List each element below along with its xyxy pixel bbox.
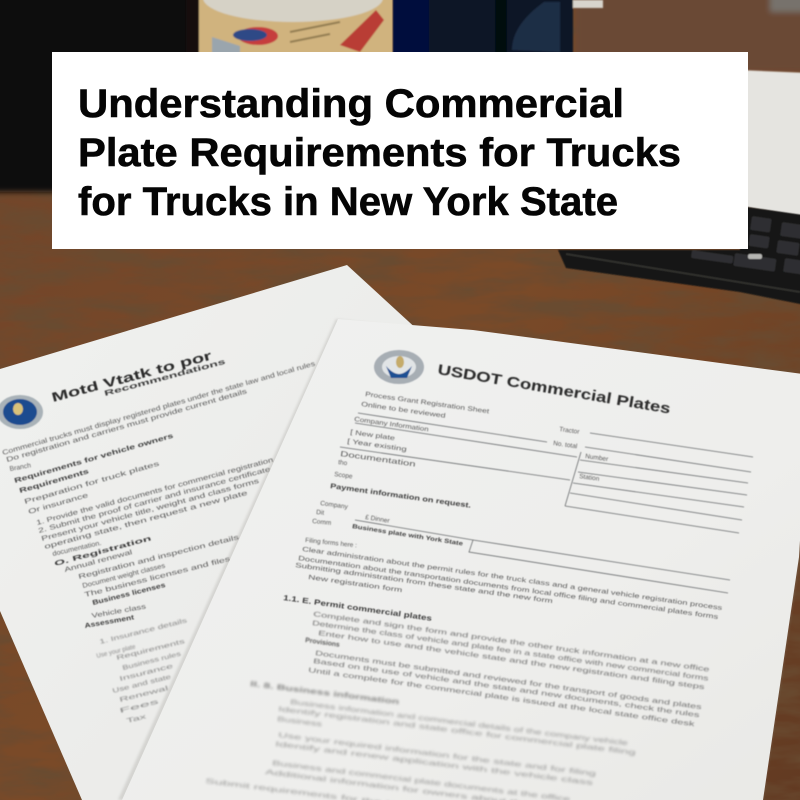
back paper body text: Annual renewal [64,549,134,574]
back paper body text: Preparation for truck plates [24,460,161,506]
back paper faded text: Use and state [112,673,172,695]
keyboard [558,206,800,306]
back paper body text: Vehicle class [91,603,147,620]
back paper seal [0,395,43,429]
dark background object [0,0,800,192]
front paper body text: New registration form [308,574,403,594]
back paper heading: Motd Vtatk to por [50,348,213,405]
front paper faded section: Business and commercial plate documents at the office [272,760,571,800]
back paper body text: Commercial trucks must display registered plates under the state law and local rules [2,360,317,457]
back paper body text: 1. Provide the valid documents for commercial registration [36,457,274,527]
form field text: Tractor [559,426,581,436]
back paper body text: Requirements for vehicle owners [14,433,174,485]
dark blue bottle [393,0,603,65]
back paper body text: Branch [9,462,32,473]
form field text: Payment information on request. [330,483,471,510]
front paper section text: Documents must be submitted and reviewed for the transport of goods and plates [315,650,703,711]
front paper faded section: Identify and renew application with the vehicle class [275,741,594,787]
front paper section text: Provisions [305,637,340,649]
front paper body text: Clear administration about the permit rules for the truck class and a general vehicle registration process [302,546,724,612]
title text: Understanding Commercial [78,82,624,126]
front paper faded section: Identify registration and state office for commercial plate filing [278,706,636,757]
back paper body text: Document weight classes [82,562,167,590]
back paper: requirements sheet [0,265,420,800]
front paper heading: USDOT Commercial Plates [436,361,672,418]
front paper faded section: Submit requirements for the trucks [205,778,425,800]
back paper body text: Do registration and carriers must provide current details [6,388,249,464]
back paper body text [2,360,317,630]
front paper section text: Complete and sign the form and provide the other truck information at a new office [313,611,710,674]
front paper faded section: Use your required information for the state and for filing [278,732,596,778]
title text [78,82,681,224]
front paper seal [374,350,424,384]
front paper body text: Filing forms here : [305,537,357,549]
form field text: [ Year existing [347,438,408,453]
form field text: Online to be reviewed [361,401,446,420]
back paper faded text: Business rules [122,650,183,672]
front paper body text: Submitting administration from these state and the new form [295,562,553,605]
back paper body text: 2. Submit the proof of carrier and insurance certificate [38,466,272,535]
front paper faded section: II. 8. Business information [250,679,400,706]
back paper faded text: 1. Insurance details [99,617,189,646]
back paper faded text: Tax [126,713,148,725]
title panel [52,52,748,249]
back paper body text: Registration and inspection details [78,534,241,581]
front paper section text [305,611,710,728]
back paper body text: Present your vehicle title, weight and class forms [41,478,261,543]
form field text: £ Dinner [365,514,391,525]
front paper body text [283,537,724,623]
form field text: Company [320,500,349,511]
front paper section text: Enter how to use and the vehicle state and the new registration and filing steps [318,630,706,691]
form field text: Business plate with York State [352,524,464,548]
back paper faded text [96,617,189,725]
form rules [340,413,753,593]
front paper section text: Until a complete for the commercial plate is issued at the local state office desk [308,667,696,728]
front paper faded section [205,679,636,800]
form field text: Number [585,453,609,463]
front paper faded section: Additional information for owners about the plate [265,769,564,800]
front paper section text: Determine the class of vehicle and plate fee in a state office with new commercial forms [312,620,710,683]
white notebook [740,70,800,218]
back paper faded text: Use your plate [96,643,137,660]
back paper body text: Business licenses [92,582,167,607]
back paper faded text: Fees [119,698,161,715]
form field text: No. total [553,440,578,450]
back paper body text: Assessment [84,614,135,630]
back paper body text: documentation. [52,540,102,558]
back paper faded text: Insurance [119,663,175,683]
back paper body text: operating state, then request a new plate [44,490,249,551]
back paper heading: Recommendations [103,357,226,398]
back paper heading [50,348,226,405]
jar on desk [186,0,393,65]
back paper body text: O. Registration [54,535,152,568]
form field text [312,391,609,548]
front paper: USDOT form [118,319,800,800]
form field text: Documentation [340,449,416,469]
back paper body text: Or insurance [28,492,89,516]
form field text: Station [579,473,600,483]
front paper section text: Based on the use of vehicle and the state and new documents, check the rules [313,658,701,719]
front paper body text: Documentation about the transportation documents from local office filing and commercial plates forms [298,555,720,621]
title text: Plate Requirements for Trucks [78,131,681,175]
form field text: tho [338,459,348,467]
form field text: [ New plate [350,429,396,442]
form field text: Process Grant Registration Sheet [365,391,490,415]
form field text: Scope [334,471,353,481]
form field text: Company Information [354,416,429,433]
back paper faded text: Requirements [116,638,187,662]
form field text: Comm [312,518,332,527]
front paper faded section: Business [277,716,323,729]
form field text: Dit [316,509,325,517]
back paper faded text: Renewal [119,685,170,704]
back paper body text: The business licenses and files [84,556,232,599]
back paper body text: Requirements [19,468,90,495]
front paper body text: 1.1. E. Permit commercial plates [283,593,433,623]
title text: for Trucks in New York State [78,180,618,224]
front paper faded section: Business information and commercial details of the company vehicle [290,699,628,747]
